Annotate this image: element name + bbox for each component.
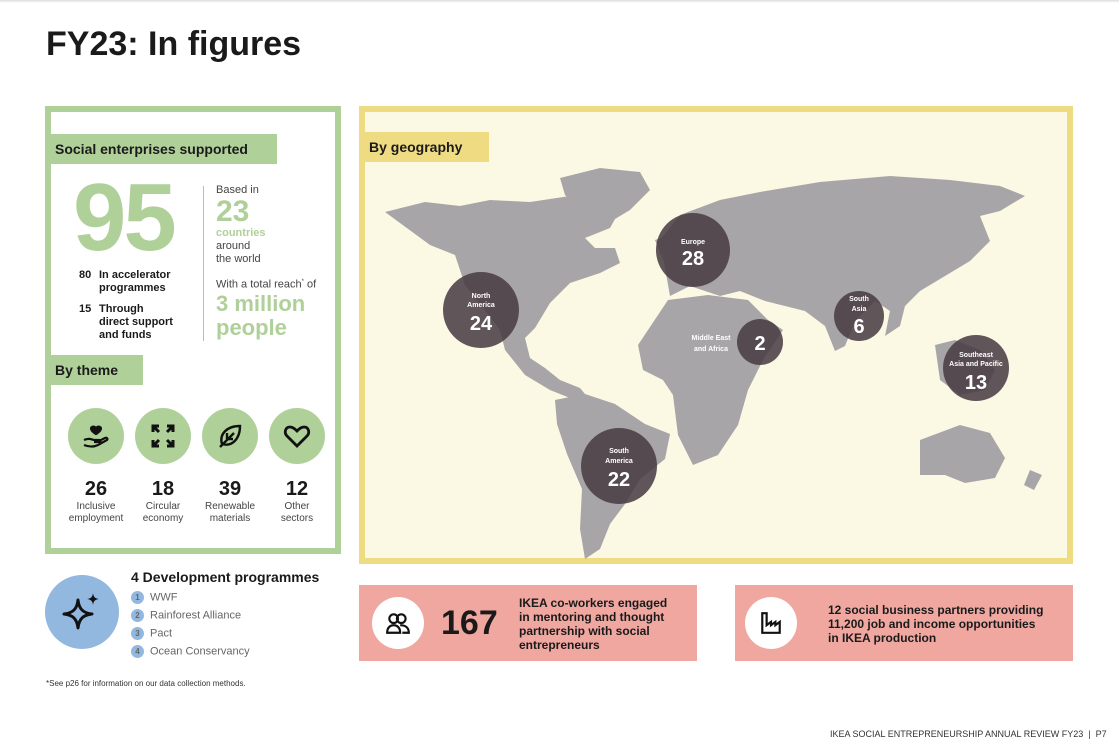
bubble: southeast asia: Asia and Pacific [949, 361, 1003, 368]
text: IKEA co-workers engaged [519, 596, 667, 610]
text: 12 social business partners providing [828, 603, 1043, 617]
bubble: south america: 22 [608, 469, 630, 491]
bubble: south asia: 6 [853, 316, 865, 338]
theme: renewable materials: 39 [219, 478, 241, 500]
footnote: *See p26 for information on our data collection methods. [46, 679, 246, 688]
breakdown text: Through [99, 303, 144, 315]
bubble: south asia [834, 291, 884, 341]
bubble: south asia: Asia [852, 306, 866, 313]
breakdown text: programmes [99, 282, 166, 294]
theme: inclusive employment: Inclusive employment [69, 501, 123, 524]
programmes list: Rainforest Alliance [150, 609, 241, 621]
card: business partners [735, 585, 1073, 661]
countries text [216, 184, 316, 340]
theme: inclusive employment [68, 408, 124, 524]
bubble: southeast asia: Southeast [959, 352, 994, 359]
theme: inclusive employment: 26 [85, 478, 107, 500]
card: co-workers [359, 585, 697, 661]
bubble: middle east and africa: Middle East [692, 335, 731, 342]
heading: social enterprises supported: Social enterprises supported [55, 141, 248, 157]
top shadow line [0, 0, 1119, 3]
icon: factory [745, 597, 797, 649]
title: FY23: In figures [46, 25, 301, 63]
theme: other sectors: Other [284, 501, 310, 512]
bubble: north america: America [467, 302, 495, 309]
breakdown text: In accelerator [99, 269, 171, 281]
breakdown text: and funds [99, 329, 152, 341]
programmes list: 2 [135, 611, 140, 620]
programmes list: Ocean Conservancy [150, 645, 250, 657]
breakdown text: 15 [79, 303, 91, 315]
countries text: 23 [216, 195, 249, 228]
heading: by theme [45, 355, 143, 385]
text: 11,200 job and income opportunities [828, 617, 1035, 631]
breakdown text [79, 269, 173, 341]
theme: circular economy: 18 [152, 478, 174, 500]
number 167: 167 [441, 604, 498, 642]
icon: people [372, 597, 424, 649]
bubble: middle east and africa [692, 319, 783, 365]
big number 95: 95 [73, 164, 174, 271]
countries text: countries [216, 227, 266, 239]
theme: renewable materials: Renewable materials [205, 501, 255, 524]
bubble: europe: Europe [681, 239, 705, 246]
text [828, 603, 1043, 645]
countries text: 3 million [216, 291, 305, 316]
programmes list: Pact [150, 627, 172, 639]
countries text: around [216, 240, 250, 252]
footer: IKEA SOCIAL ENTREPRENEURSHIP ANNUAL REVIEW FY23 | P7 [830, 729, 1107, 739]
countries text: With a total reach* of [216, 279, 316, 291]
theme: other sectors: 12 [286, 478, 308, 500]
heading: by theme: By theme [55, 362, 118, 378]
panel: by geography [359, 106, 1073, 564]
heading: by geography: By geography [369, 139, 462, 155]
text: in mentoring and thought [519, 610, 664, 624]
text [519, 596, 667, 652]
bubble: south america: America [605, 458, 633, 465]
bubble: europe: 28 [682, 248, 704, 270]
panel: social enterprises [45, 106, 341, 554]
bubble: north america [443, 272, 519, 348]
programmes list [131, 569, 319, 658]
heading: social enterprises supported [45, 134, 277, 164]
bubble: middle east and africa: 2 [754, 333, 766, 355]
theme: other sectors: sectors [281, 513, 313, 524]
programmes list: 4 Development programmes [131, 569, 319, 585]
bubble: southeast asia: 13 [965, 372, 987, 394]
programmes list: 1 [135, 593, 140, 602]
text: partnership with social [519, 624, 650, 638]
bubble: middle east and africa: and Africa [694, 346, 728, 353]
breakdown text: 80 [79, 269, 91, 281]
theme: other sectors [269, 408, 325, 524]
programmes list: 3 [135, 629, 140, 638]
bubble: southeast asia [943, 335, 1009, 401]
panel: development programmes [45, 569, 319, 658]
text: in IKEA production [828, 631, 936, 645]
theme: circular economy [135, 408, 191, 524]
countries text: Based in [216, 184, 259, 196]
text: entrepreneurs [519, 638, 600, 652]
bubble: north america: 24 [470, 313, 493, 335]
theme: renewable materials [202, 408, 258, 524]
programmes list: WWF [150, 591, 177, 603]
bubble: north america: North [472, 293, 490, 300]
programmes list: 4 [135, 647, 140, 656]
bubble: south america [581, 428, 657, 504]
bubble: south asia: South [849, 296, 869, 303]
world map [385, 168, 1042, 559]
bubble: europe [656, 213, 730, 287]
breakdown text: direct support [99, 316, 173, 328]
theme: circular economy: Circular economy [143, 501, 183, 524]
countries text: people [216, 315, 287, 340]
bubble: south america: South [609, 448, 629, 455]
heading: by geography [359, 132, 489, 162]
countries text: the world [216, 253, 261, 265]
icon: sparkle [45, 575, 119, 649]
